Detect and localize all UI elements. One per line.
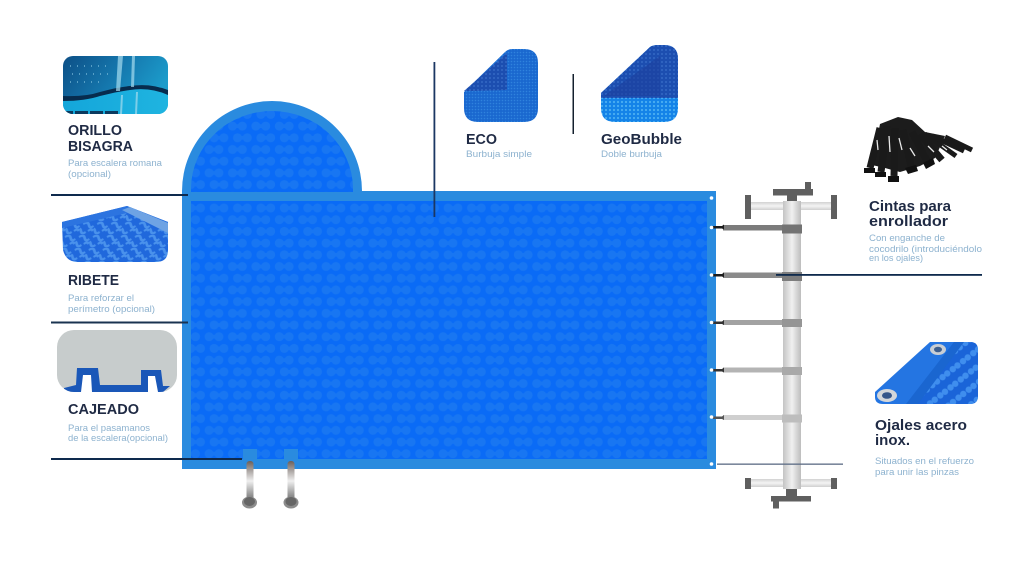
eyelets	[710, 196, 713, 200]
pool ladder handles	[242, 449, 298, 508]
text: cintas para enrollador	[869, 233, 982, 264]
text: ojales: Situados en el refuerzo	[875, 456, 974, 467]
straps	[723, 225, 783, 230]
text: cajeado: de la escalera(opcional)	[68, 433, 168, 444]
text: eco: Burbuja simple	[466, 149, 532, 160]
text: orillo bisagra: Para escalera romana	[68, 158, 163, 169]
cover border	[182, 101, 716, 469]
heading: orillo bisagra: BISAGRA	[68, 139, 134, 155]
leader lines	[51, 62, 982, 465]
text: ojales	[875, 456, 974, 478]
reel roller	[710, 182, 837, 508]
image: ojales	[875, 342, 978, 404]
bottom crossbar	[750, 479, 832, 487]
image: orillo bisagra	[63, 56, 168, 114]
arch bubble surface	[191, 111, 353, 192]
heading: ojales	[875, 418, 967, 449]
heading: orillo bisagra: ORILLO	[68, 123, 122, 139]
image: ribete	[62, 206, 168, 262]
pool cover	[182, 101, 716, 469]
text: ribete	[68, 293, 155, 315]
heading: cintas para enrollador	[869, 199, 952, 230]
image: eco	[464, 49, 538, 122]
heading: eco: ECO	[466, 132, 497, 148]
heading: ojales: inox.	[875, 433, 910, 449]
heading: cajeado: CAJEADO	[68, 402, 139, 418]
heading: cintas para enrollador: enrollador	[869, 214, 948, 230]
text: cintas para enrollador: Con enganche de	[869, 233, 945, 244]
text: cajeado	[68, 423, 168, 444]
image: black straps	[864, 117, 972, 182]
main bubble surface	[191, 201, 707, 459]
heading: ojales: Ojales acero	[875, 418, 967, 434]
heading: orillo bisagra	[68, 123, 134, 155]
text: orillo bisagra	[68, 158, 163, 180]
image: cajeado	[57, 330, 177, 392]
text: ribete: perímetro (opcional)	[68, 304, 155, 315]
text: cintas para enrollador: cocodrilo (introduciéndolo	[869, 244, 982, 255]
text: cintas para enrollador: en los ojales)	[869, 253, 923, 264]
image: geobubble	[601, 45, 678, 122]
heading: geobubble: GeoBubble	[601, 132, 682, 148]
pole	[783, 201, 801, 489]
top crossbar	[750, 202, 832, 210]
text: ribete: Para reforzar el	[68, 293, 134, 304]
heading: ribete: RIBETE	[68, 273, 119, 289]
heading: cintas para enrollador: Cintas para	[869, 199, 952, 215]
clips	[713, 224, 724, 230]
text: cajeado: Para el pasamanos	[68, 423, 150, 434]
text: ojales: para unir las pinzas	[875, 467, 959, 478]
text: orillo bisagra: (opcional)	[68, 169, 111, 180]
text: geobubble: Doble burbuja	[601, 149, 663, 160]
